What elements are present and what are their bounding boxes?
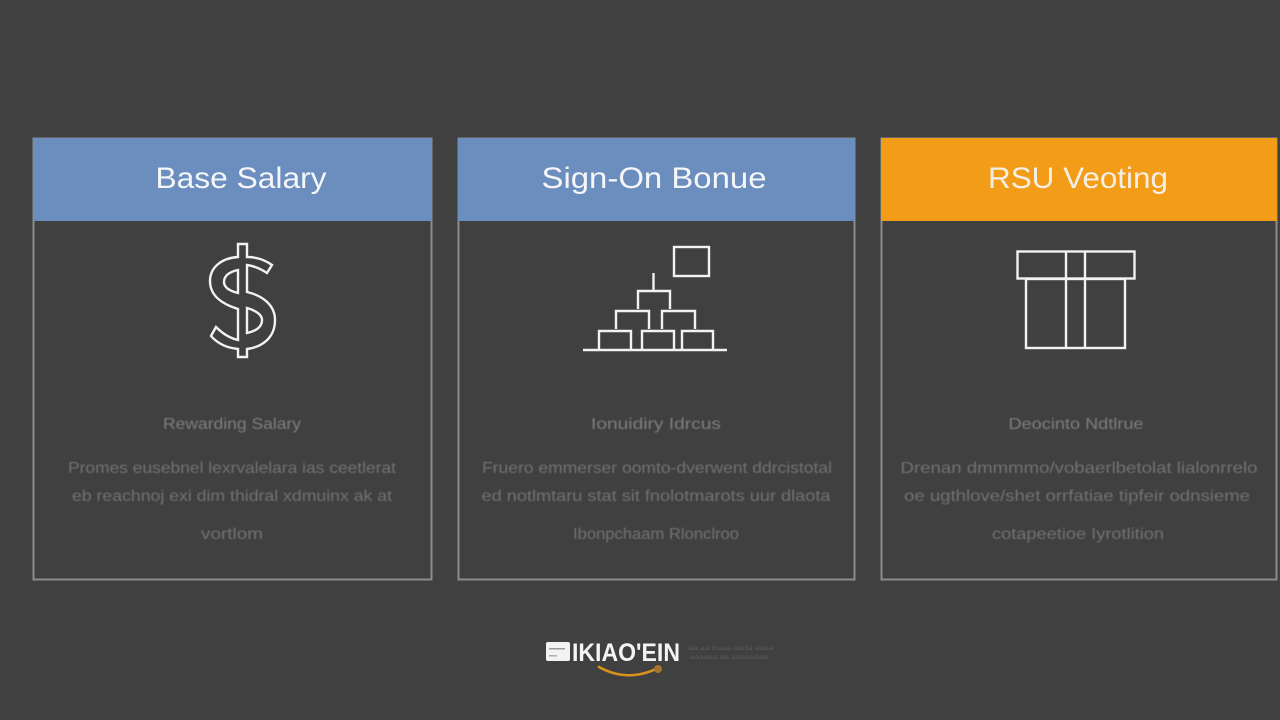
description: sign-on bonus: Ibonpchaam Rlonclroo — [573, 526, 739, 543]
icon: stacked blocks — [583, 247, 727, 350]
panel: sign-on bonus — [458, 138, 855, 580]
description: rsu vesting: oe ugthlove/shet orrfatiae tipfeir odnsieme — [904, 488, 1250, 505]
description: rsu vesting — [900, 460, 1258, 543]
logo: tagline: aaaaaa aa aaaaaaaa — [690, 654, 768, 661]
logo: wordmark: IKIAO'EIN — [572, 639, 680, 667]
subheading: base salary: Rewarding Salary — [163, 416, 301, 433]
icon: gift box — [1018, 252, 1134, 348]
logo: card mark — [546, 642, 570, 661]
header: rsu vesting: RSU Veoting — [988, 162, 1168, 195]
description: base salary: Promes eusebnel lexrvalelara ias ceetlerat — [68, 460, 397, 477]
logo: tagline: aa aa bsaa dada aaaa — [688, 645, 775, 652]
panel: base salary — [33, 138, 432, 580]
subheading: rsu vesting: Deocinto Ndtlrue — [1008, 416, 1144, 433]
icon: dollar sign — [210, 244, 275, 357]
description: sign-on bonus: Fruero emmerser oomto-dverwent ddrcistotal — [482, 460, 832, 477]
header: base salary: Base Salary — [156, 162, 326, 195]
logo: smile arrow — [599, 665, 662, 675]
description: sign-on bonus — [482, 460, 832, 543]
header: sign-on bonus — [458, 138, 855, 221]
description: base salary: vortlom — [201, 526, 263, 543]
description: base salary: eb reachnoj exi dim thidral xdmuinx ak at — [72, 488, 393, 505]
description: base salary — [68, 460, 397, 543]
header: sign-on bonus: Sign-On Bonue — [542, 162, 766, 195]
logo: tagline — [688, 645, 775, 661]
description: sign-on bonus: ed notlmtaru stat sit fnolotmarots uur dlaota — [482, 488, 831, 505]
logo — [546, 639, 775, 675]
header: rsu vesting — [881, 138, 1277, 221]
description: rsu vesting: cotapeetioe Iyrotlition — [992, 526, 1164, 543]
panel: rsu vesting — [881, 138, 1277, 580]
subheading: sign-on bonus: Ionuidiry Idrcus — [591, 416, 721, 433]
header: base salary — [33, 138, 432, 221]
description: rsu vesting: Drenan dmmmmo/vobaerlbetolat lialonrrelo — [900, 460, 1258, 477]
